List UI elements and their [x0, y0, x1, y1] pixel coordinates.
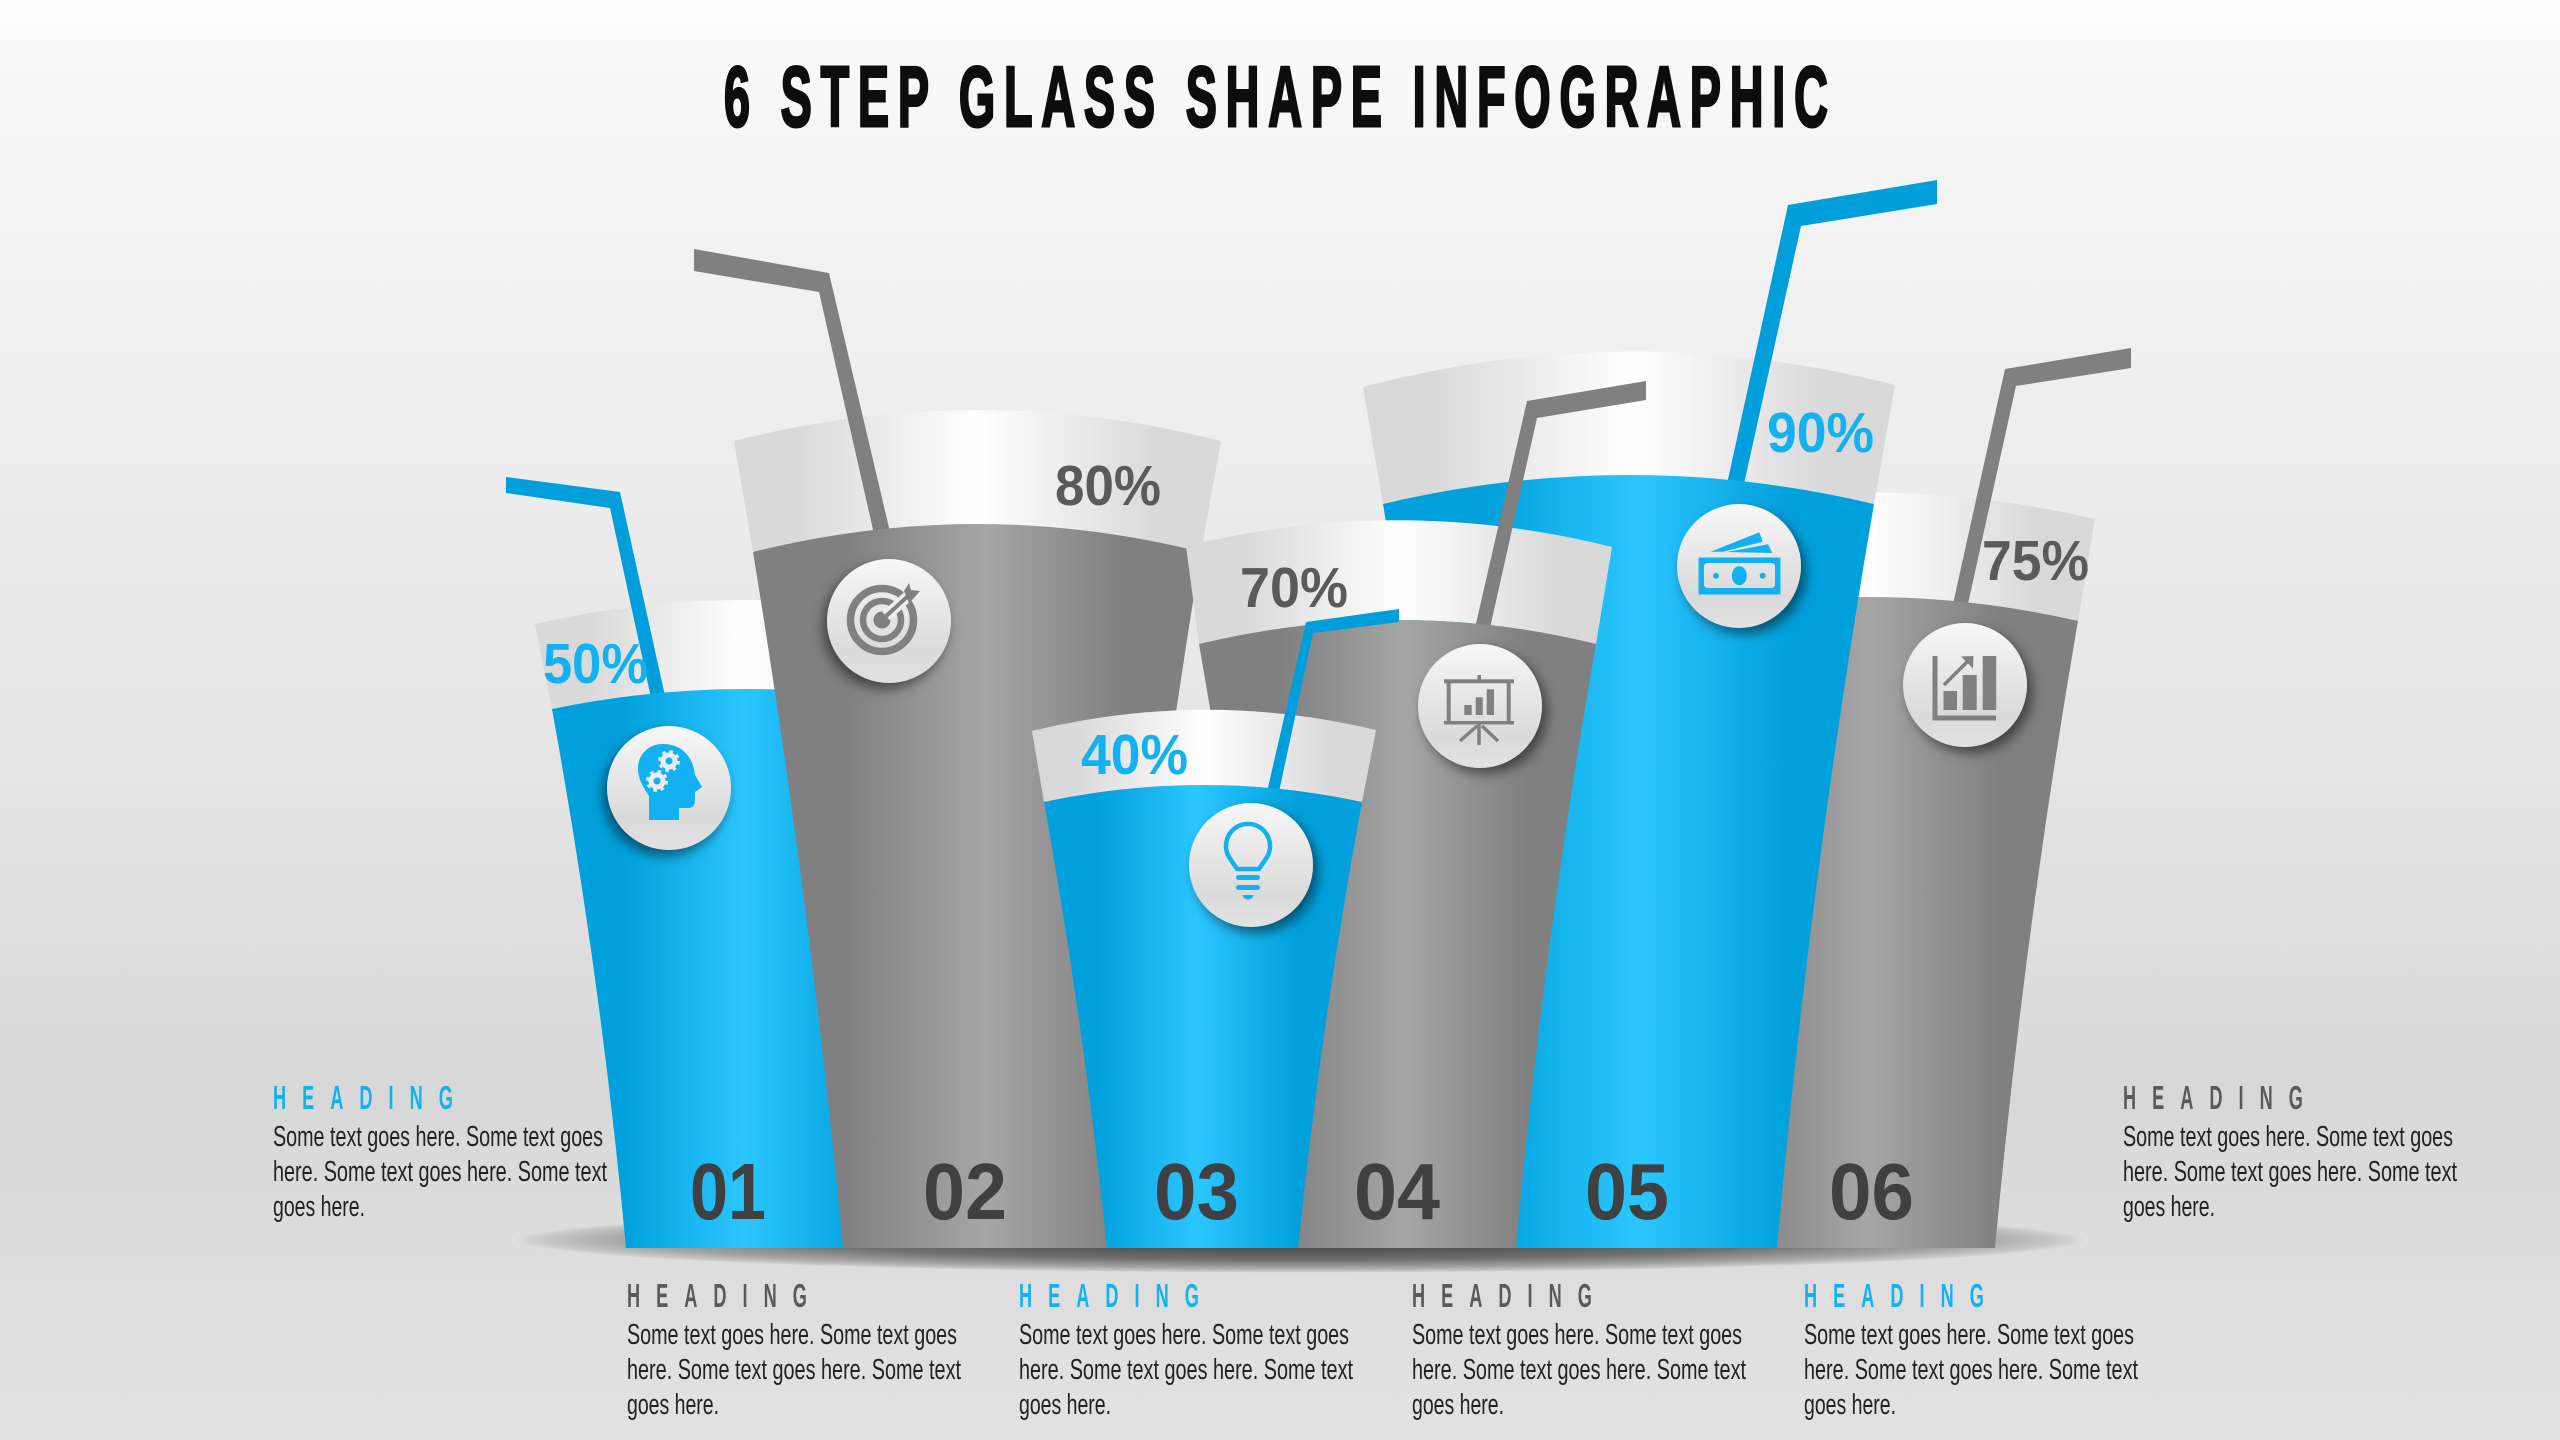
text block: bottom heading 4: here. Some text goes here. Some text [1804, 1354, 2138, 1386]
glass 5 [1363, 180, 1937, 1248]
text block: right heading: HEADING [2123, 1079, 2303, 1116]
glass 6 [1641, 348, 2131, 1248]
glass 1 percent: 50% [543, 632, 648, 696]
text block: bottom heading 4: HEADING [1804, 1277, 1984, 1314]
text block: bottom heading 1: HEADING [627, 1277, 807, 1314]
title: 6 STEP GLASS SHAPE INFOGRAPHIC [724, 49, 1828, 145]
glass 6 rim [1641, 492, 2095, 621]
glass 3 number: 03 [1154, 1147, 1239, 1236]
text block: bottom heading 2 [1019, 1277, 1353, 1421]
text block: left heading: HEADING [273, 1079, 453, 1116]
icon: target with arrow [827, 559, 951, 683]
text block: bottom heading 1: here. Some text goes here. Some text [627, 1354, 961, 1386]
icon: light bulb [1189, 803, 1313, 927]
base shadow [508, 1207, 2092, 1273]
glass 1 liquid [552, 689, 938, 1248]
glass 5 straw [1727, 180, 1937, 484]
icon: head with gears [607, 726, 731, 850]
glass 2 rim [734, 410, 1221, 552]
glass 2 percent: 80% [1055, 454, 1161, 518]
glass 4 rim [1186, 520, 1612, 644]
glass 4 percent: 70% [1240, 556, 1348, 620]
glass 1 rim [535, 600, 955, 709]
glass 1 straw [506, 477, 665, 698]
glass 2 [694, 249, 1221, 1248]
icon: rising bar chart [1903, 623, 2027, 747]
glass 5 percent: 90% [1767, 401, 1874, 465]
text block: bottom heading 3: goes here. [1412, 1389, 1504, 1421]
glass 1 [506, 477, 955, 1248]
text block: bottom heading 4 [1804, 1277, 2138, 1421]
icon: banknotes [1677, 504, 1801, 628]
text block: right heading [2123, 1079, 2457, 1223]
text block: right heading: goes here. [2123, 1191, 2215, 1223]
glass 4 number: 04 [1354, 1147, 1440, 1236]
text block: bottom heading 4: goes here. [1804, 1389, 1896, 1421]
text block: bottom heading 2: HEADING [1019, 1277, 1199, 1314]
glass 2 straw [694, 249, 890, 534]
text block: bottom heading 1 [627, 1277, 961, 1421]
glass 6 percent: 75% [1982, 529, 2089, 593]
text block: left heading: Some text goes here. Some text goes [273, 1121, 603, 1153]
text block: bottom heading 3: here. Some text goes here. Some text [1412, 1354, 1746, 1386]
glass 2 liquid [753, 524, 1201, 1248]
glass 3 percent: 40% [1081, 723, 1188, 787]
glass 6 liquid [1658, 597, 2078, 1248]
glass 5 liquid [1383, 475, 1874, 1248]
text block: bottom heading 3 [1412, 1277, 1746, 1421]
glass 3 liquid [1044, 785, 1362, 1248]
glass 4 straw [1475, 381, 1646, 628]
glass 6 straw [1953, 348, 2131, 604]
glass 5 rim [1363, 351, 1895, 504]
text block: left heading: here. Some text goes here. Some text [273, 1156, 607, 1188]
text block: bottom heading 3: HEADING [1412, 1277, 1592, 1314]
icon: presentation board [1418, 644, 1542, 768]
glass 6 number: 06 [1829, 1147, 1914, 1236]
text block: bottom heading 3: Some text goes here. Some text goes [1412, 1319, 1742, 1351]
text block: bottom heading 2: Some text goes here. Some text goes [1019, 1319, 1349, 1351]
glass 3 [1032, 609, 1399, 1248]
text block: left heading [273, 1079, 607, 1223]
glass 4 [1186, 381, 1646, 1248]
text block: bottom heading 4: Some text goes here. Some text goes [1804, 1319, 2134, 1351]
glass 1 number: 01 [690, 1147, 766, 1236]
text block: left heading: goes here. [273, 1191, 365, 1223]
text block: bottom heading 1: Some text goes here. Some text goes [627, 1319, 957, 1351]
glass 4 liquid [1199, 620, 1596, 1248]
text block: bottom heading 2: goes here. [1019, 1389, 1111, 1421]
glass 2 number: 02 [923, 1147, 1007, 1236]
text block: bottom heading 2: here. Some text goes here. Some text [1019, 1354, 1353, 1386]
glass 3 rim [1032, 710, 1376, 802]
glass 3 straw [1267, 609, 1399, 792]
text block: bottom heading 1: goes here. [627, 1389, 719, 1421]
glass 5 number: 05 [1585, 1147, 1669, 1236]
